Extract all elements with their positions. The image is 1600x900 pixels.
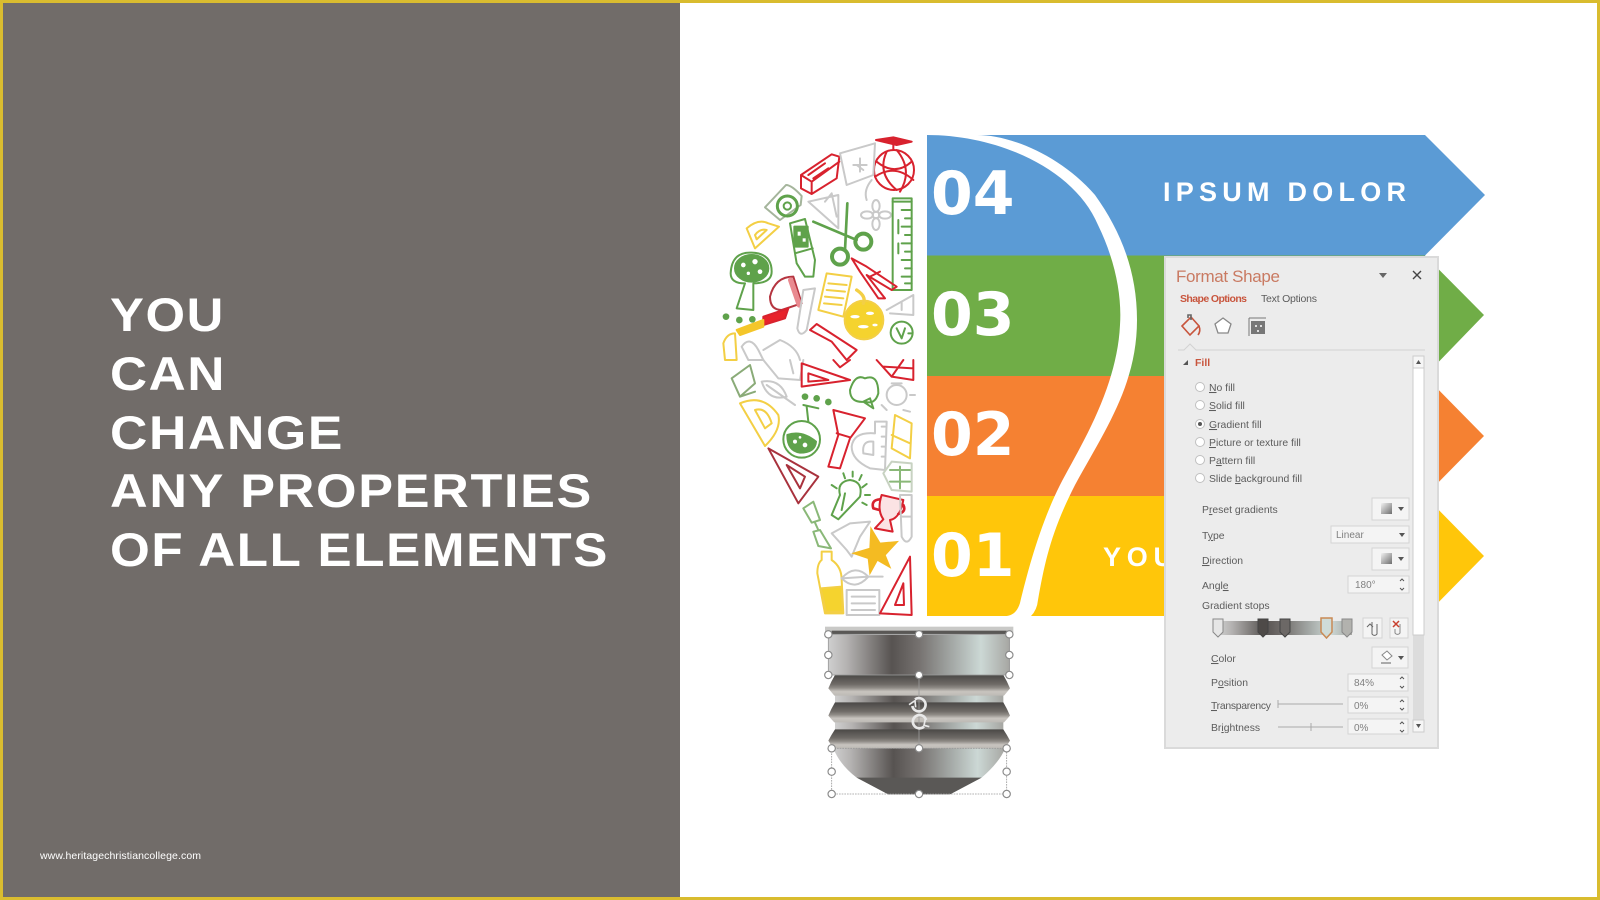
icon: green glasses bbox=[803, 502, 831, 548]
icon: layout bbox=[1249, 318, 1266, 336]
icon: paper and flower bbox=[840, 143, 891, 230]
icon: book bbox=[801, 154, 839, 194]
tabs: Text Options bbox=[1261, 293, 1317, 305]
icon: scissors bbox=[813, 203, 871, 265]
website url: www.heritagechristiancollege.com bbox=[39, 850, 201, 862]
base thread gap two bbox=[835, 721, 1003, 731]
bar 01 bbox=[927, 496, 1484, 616]
numbers: 01 bbox=[931, 521, 1014, 591]
gradient property labels: Gradient stops bbox=[1202, 601, 1270, 612]
type dropdown bbox=[1331, 526, 1409, 543]
fill radio options: Gradient fill bbox=[1209, 420, 1262, 431]
selection frame bbox=[828, 634, 1009, 794]
icon: close bbox=[1413, 271, 1421, 279]
bar label: ipsum dolor: IPSUM DOLOR bbox=[1163, 177, 1406, 207]
scrollbar bbox=[1413, 356, 1424, 732]
base thread gaps bbox=[835, 693, 1003, 703]
brightness slider bbox=[1278, 719, 1408, 734]
icon: grey bulb bbox=[882, 383, 915, 412]
base tip bbox=[857, 778, 982, 794]
gradient property labels: Color bbox=[1211, 654, 1236, 665]
gradient property labels bbox=[1202, 505, 1278, 734]
fill radio options: Solid fill bbox=[1209, 401, 1245, 412]
panel: left grey headline panel bbox=[0, 0, 680, 900]
icon: apple bbox=[845, 290, 883, 339]
icon: red set square bbox=[880, 557, 912, 615]
direction button bbox=[1372, 548, 1409, 570]
color button bbox=[1372, 647, 1408, 668]
icon: grey leaf stem bbox=[842, 570, 883, 585]
icon: yellow bottle bbox=[817, 552, 843, 613]
numbers: 04 bbox=[931, 159, 1014, 229]
panel: format shape dialog bbox=[1165, 257, 1438, 748]
icon: dropdown arrow bbox=[1379, 273, 1387, 278]
gradient property labels: Angle bbox=[1202, 581, 1229, 592]
gradient property labels: Preset gradients bbox=[1202, 505, 1278, 516]
base cap bbox=[825, 627, 1013, 635]
fill radio options: Picture or texture fill bbox=[1209, 438, 1301, 449]
icon: yellow protractor half bbox=[740, 400, 779, 446]
numbers: 03 bbox=[931, 280, 1014, 350]
icon collage: left half of bulb, lower bbox=[732, 360, 915, 615]
icon: green dots bbox=[723, 313, 756, 323]
icon: paper note bbox=[818, 273, 852, 317]
icon: grey bell bbox=[832, 522, 870, 557]
chart: four stacked arrow bars bbox=[927, 135, 1485, 616]
angle input: 180° bbox=[1355, 580, 1376, 591]
headline bbox=[110, 288, 609, 576]
icon: yellow protractor bbox=[747, 222, 779, 248]
icon: green light bulb bbox=[832, 472, 870, 519]
icon: grey leaf bbox=[742, 342, 763, 360]
icon: green dots bbox=[802, 393, 832, 405]
icon: red flask base bbox=[833, 360, 850, 367]
type dropdown: Linear bbox=[1336, 530, 1364, 541]
gradient property labels: Position bbox=[1211, 678, 1248, 689]
icon: green leaf bbox=[732, 365, 755, 397]
icon: test tube bbox=[797, 288, 815, 334]
preset gradients button bbox=[1372, 498, 1409, 520]
brightness slider: 0% bbox=[1354, 723, 1369, 734]
bulb base with selection handles bbox=[825, 627, 1013, 798]
fill section header bbox=[1183, 357, 1210, 369]
icon: grey folder bbox=[763, 340, 800, 360]
numbers bbox=[931, 159, 1014, 591]
tabs bbox=[1180, 293, 1317, 305]
icon: rotation handles bbox=[909, 698, 929, 728]
numbers: 02 bbox=[931, 400, 1014, 470]
icon: globe bbox=[874, 137, 914, 192]
icon: backpack bbox=[883, 462, 912, 492]
base thread one bbox=[828, 675, 1010, 696]
fill radio options: Pattern fill bbox=[1209, 456, 1255, 467]
position input: 84% bbox=[1354, 678, 1374, 689]
fill section header: Fill bbox=[1195, 357, 1210, 369]
headline: OF ALL ELEMENTS bbox=[110, 523, 609, 576]
icon: set square bbox=[808, 193, 838, 228]
remove stop button bbox=[1390, 618, 1408, 638]
base collar bbox=[828, 635, 1010, 675]
gradient property labels: Transparency bbox=[1211, 701, 1272, 712]
icon: letter a bbox=[887, 295, 913, 315]
icon: grey abacus bbox=[847, 590, 879, 615]
angle input bbox=[1348, 576, 1409, 593]
bar 02 bbox=[927, 376, 1484, 496]
icon: microscope tree bbox=[731, 253, 772, 310]
icon: fill bucket bbox=[1182, 315, 1200, 335]
gradient property labels: Type bbox=[1202, 531, 1225, 542]
gradient property labels: Direction bbox=[1202, 556, 1243, 567]
tabs: Shape Options bbox=[1180, 293, 1247, 305]
position input bbox=[1348, 674, 1408, 691]
icon: grey protractor bbox=[852, 422, 887, 470]
icon: tape dispenser bbox=[765, 185, 802, 220]
icon: paint tube bbox=[770, 277, 802, 310]
icon: grey book bbox=[763, 360, 803, 380]
icon: grey leaf bbox=[762, 381, 795, 405]
headline: YOU bbox=[110, 288, 225, 341]
fill radio options bbox=[1196, 382, 1302, 485]
transparency slider bbox=[1278, 697, 1408, 713]
bar label: you: YOU bbox=[1103, 542, 1173, 572]
icon: round flask bbox=[783, 405, 820, 458]
icon: red fan bbox=[877, 360, 913, 380]
dialog title: Format Shape bbox=[1176, 267, 1280, 286]
add stop button bbox=[1363, 618, 1382, 638]
icon: glue bottle bbox=[790, 219, 815, 277]
icon: red triangle ruler bbox=[802, 363, 850, 387]
icon: yellow crayon bbox=[723, 333, 737, 360]
icon: yellow cube bbox=[892, 415, 912, 458]
icon: circle badge bbox=[891, 322, 913, 344]
headline: CHANGE bbox=[110, 406, 344, 459]
icon: pentagon bbox=[1215, 318, 1231, 333]
selection handles bbox=[825, 631, 1013, 798]
icon: green apple bbox=[850, 377, 878, 408]
base neck bbox=[833, 748, 1005, 794]
bar 04 bbox=[927, 135, 1485, 256]
fill radio options: Slide background fill bbox=[1209, 474, 1302, 485]
headline: ANY PROPERTIES bbox=[110, 464, 593, 517]
bar 03 bbox=[927, 256, 1484, 376]
gradient stops bar bbox=[1213, 618, 1352, 638]
divider bbox=[1178, 344, 1425, 350]
icon: trophy bbox=[873, 495, 904, 532]
gradient property labels: Brightness bbox=[1211, 723, 1260, 734]
icon: yellow star bbox=[853, 528, 897, 573]
icon: drawing compass bbox=[852, 258, 897, 298]
transparency slider: 0% bbox=[1354, 701, 1369, 712]
icon: grey test tube bbox=[900, 495, 912, 542]
icon: red flask bbox=[810, 324, 857, 360]
icon: red goblet bbox=[828, 410, 865, 468]
base thread three bbox=[828, 729, 1010, 749]
bulb outline curve bbox=[927, 135, 1137, 616]
base thread two bbox=[828, 702, 1010, 722]
icon: red triangle bbox=[768, 448, 818, 503]
icon collage: left half of bulb, upper bbox=[723, 137, 914, 360]
icon: paint brush bbox=[737, 308, 788, 335]
headline: CAN bbox=[110, 347, 226, 400]
fill radio options: No fill bbox=[1209, 383, 1235, 394]
icon: ruler bbox=[893, 198, 912, 290]
